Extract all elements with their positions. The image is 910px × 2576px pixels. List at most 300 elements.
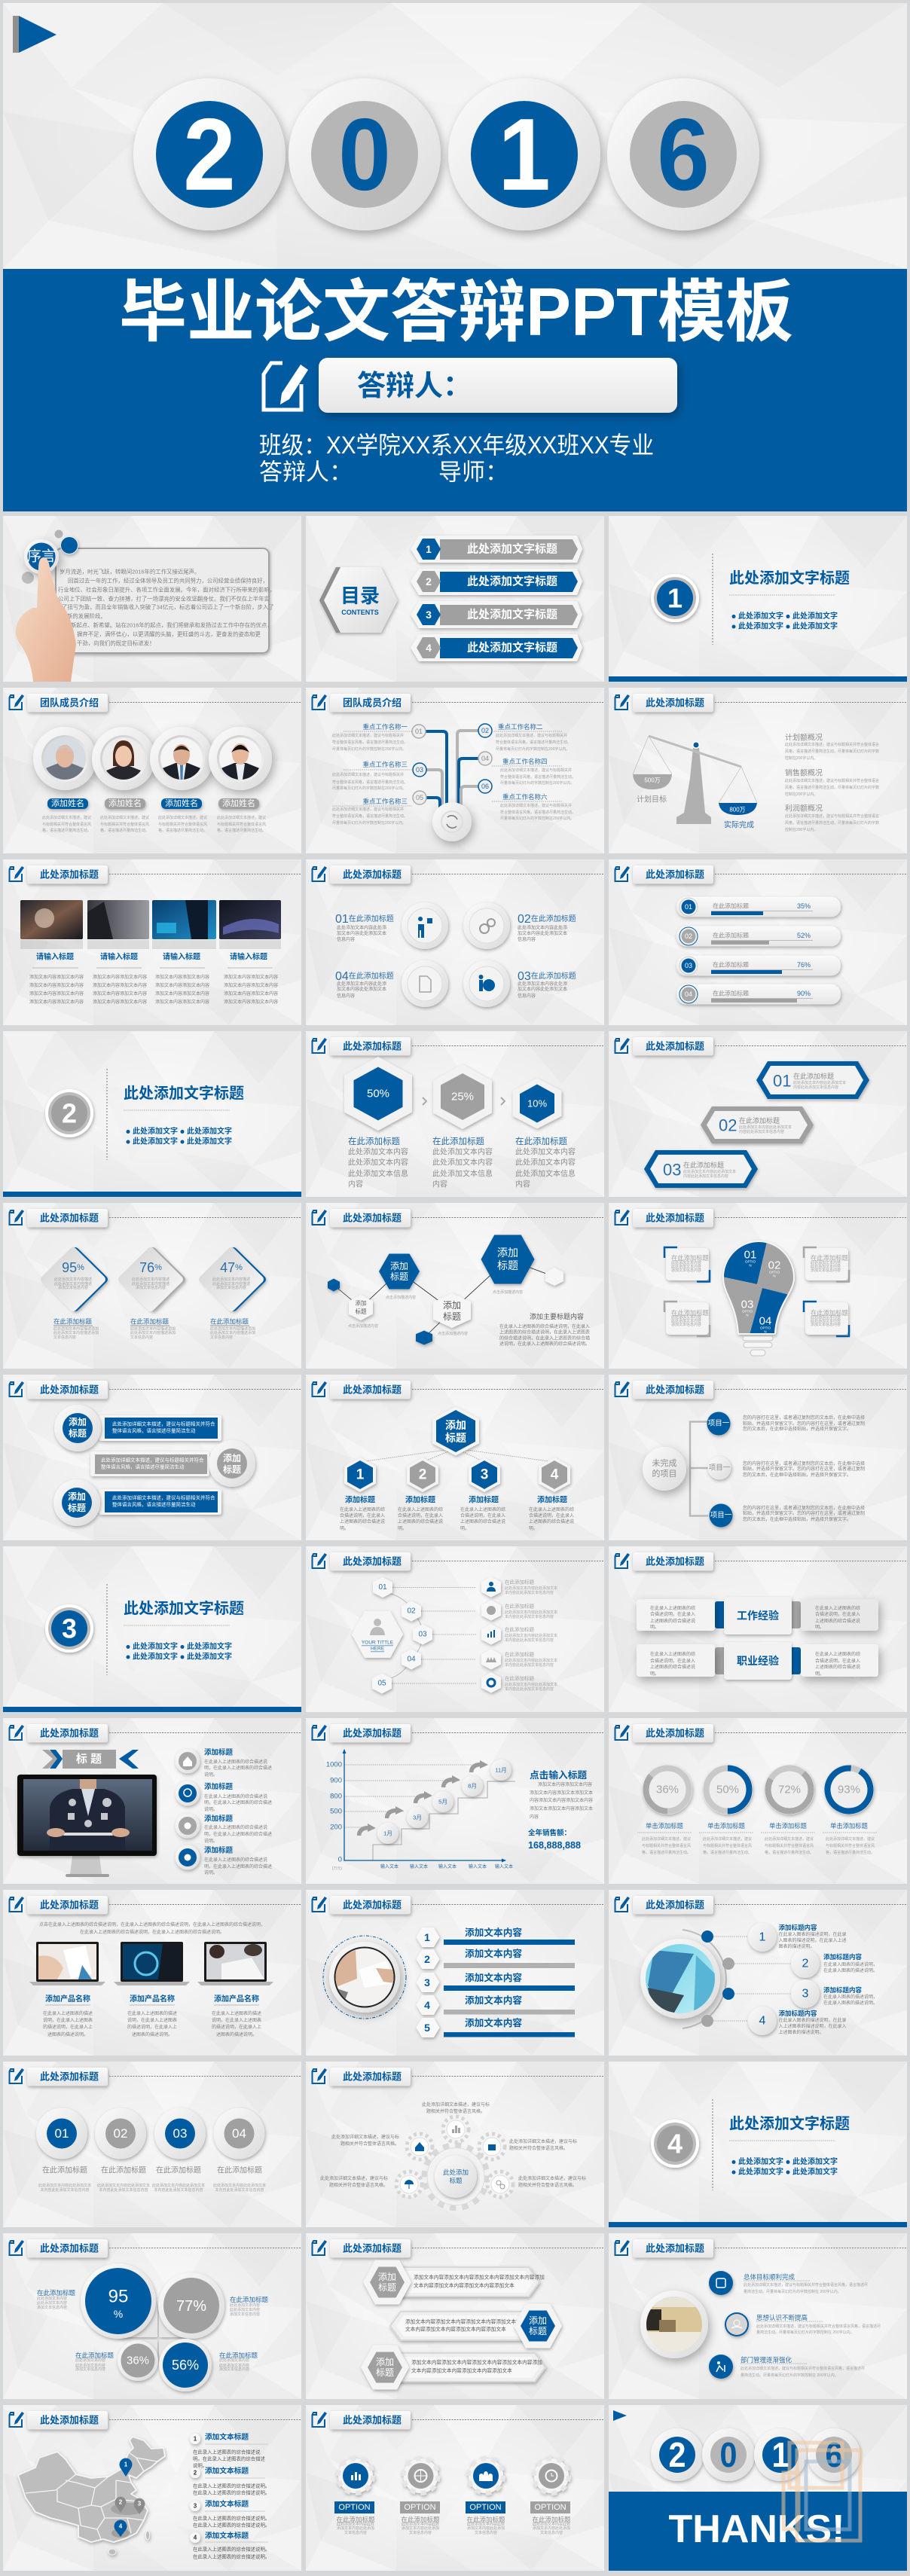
hierarchy hexagons bbox=[344, 1457, 570, 1492]
circle captions: 本内容此处添加文本信息内容 bbox=[99, 2187, 148, 2193]
slide header: 此处添加标题 bbox=[343, 1384, 402, 1395]
hierarchy captions: 在此录入上述图表的综 bbox=[340, 1506, 385, 1512]
preface badge: 序言 bbox=[27, 548, 56, 565]
member descriptions: 此处添加详细文本描述，建议 bbox=[100, 815, 149, 820]
node captions: 点击添加描述内容 bbox=[386, 1295, 416, 1300]
member portrait 1 bbox=[33, 727, 96, 790]
diamond 95%: 此处添加文本内容描述 bbox=[54, 1281, 92, 1286]
bar item 2: 添加 bbox=[223, 1452, 241, 1463]
left items bbox=[335, 913, 394, 999]
text card: 新起点、新希望。站在2016年的起点，我们将继承和发扬过去工作中存在的优点， bbox=[71, 622, 273, 628]
section number: 1 bbox=[667, 583, 682, 613]
feature text: 在此录入上述图表的综合描述说 bbox=[204, 1793, 267, 1799]
work experience row: 明。 bbox=[815, 1625, 824, 1630]
orbit arc bbox=[682, 1930, 726, 2028]
number circles: 02 bbox=[114, 2126, 127, 2141]
list texts: 此处添加文本内容此处添加文本 bbox=[505, 1610, 557, 1615]
network links bbox=[334, 1259, 554, 1338]
row 2: 添加文本内容添加文本内容添加文本内容添加文本内容添加 bbox=[405, 2318, 536, 2324]
product captions: 的描述说明，在此录入上 bbox=[212, 2024, 261, 2030]
contents row 3: 此处添加文字标题 bbox=[467, 607, 557, 621]
hierarchy captions: 合描述说明，在此录入 bbox=[529, 1512, 574, 1518]
project nodes: 项目一 bbox=[709, 1464, 731, 1472]
map pins: 2 bbox=[119, 2499, 123, 2505]
bulb card bottom left: 添加文本信息内容 bbox=[671, 1322, 701, 1327]
hierarchy captions: 上述图表的综合描述说 bbox=[529, 1518, 574, 1525]
year circles 2016: 1 bbox=[498, 97, 551, 212]
chevrons bbox=[423, 1097, 505, 1105]
bulb card top right: 添加文本信息内容 bbox=[811, 1268, 841, 1273]
text card: 回首过去一年的工作，经过全体领导及员工的共同努力，公司经营业绩保持良好， bbox=[68, 577, 268, 584]
gear text: 题相关并符合整体语言风格。 bbox=[329, 2182, 388, 2188]
item 01: 在此添加标题 bbox=[793, 1072, 834, 1080]
bubble captions: 此处添加文本内容 bbox=[230, 2303, 260, 2308]
row 1: 标题 bbox=[378, 2282, 396, 2293]
month nodes: 5月 bbox=[438, 1799, 447, 1805]
node captions: 点击添加描述内容 bbox=[348, 1323, 378, 1329]
panel: hierarchy hexagons slide bbox=[306, 1375, 604, 1540]
hexagon 25%: 25% bbox=[451, 1091, 474, 1103]
year circles: 0 bbox=[720, 2435, 737, 2474]
left work items: 重点工作名称三 bbox=[362, 798, 408, 805]
project text: 您的内容打在这里，或者通过复制您的文本后，在此框中选择 bbox=[743, 1460, 865, 1467]
option captions: 在此添加标题 bbox=[532, 2516, 571, 2523]
item 03: 内容此处添加文本信息内容 bbox=[683, 1174, 728, 1179]
network nodes: 标题 bbox=[497, 1259, 518, 1271]
section bullets bbox=[732, 2156, 838, 2177]
contents row 1: 1 bbox=[426, 543, 432, 555]
lobby photo bbox=[640, 2291, 708, 2358]
section bullets: 此处添加文字 bbox=[792, 2166, 838, 2177]
option captions bbox=[336, 2516, 571, 2535]
work experience row: 上述图表的综合描述说 bbox=[650, 1618, 695, 1624]
number circles: 4 bbox=[759, 2014, 766, 2028]
section bullets bbox=[732, 611, 838, 631]
diamond captions: 此处添加文本内容描述添加 bbox=[53, 1330, 99, 1335]
chart axes bbox=[344, 1750, 505, 1860]
bubble 56% bbox=[159, 2339, 212, 2391]
list texts: 此处添加文本内容此处添加文本 bbox=[505, 1682, 557, 1687]
contents row 1 bbox=[411, 536, 582, 563]
gear text: 此处添加详细文本描述，建议与标 bbox=[422, 2101, 490, 2107]
icon circles bbox=[402, 902, 510, 1007]
panel: four icon circles slide bbox=[306, 859, 604, 1025]
circle captions: 在此添加标题 bbox=[101, 2165, 146, 2175]
milestone text bbox=[741, 2273, 881, 2378]
option captions: 添加文本内容此处添加 bbox=[467, 2526, 505, 2531]
overview texts: 计划额概况 bbox=[785, 732, 823, 743]
diamond 95% bbox=[44, 1251, 104, 1308]
work experience row: 明。 bbox=[650, 1625, 659, 1630]
orbit text: 在此录入图表的描述说明。 bbox=[823, 2000, 878, 2006]
member portrait 2 bbox=[92, 727, 155, 790]
bulb chart: 04 bbox=[759, 1315, 771, 1327]
overview texts: 控制在200字以内。 bbox=[785, 792, 817, 797]
slide header bbox=[9, 865, 301, 884]
hierarchy captions: 添加标题 bbox=[405, 1494, 435, 1505]
year circles 2016: 0 bbox=[338, 97, 391, 212]
number circles bbox=[748, 1923, 820, 2035]
icon: document and pen bbox=[264, 363, 308, 410]
hexagon captions: 在此添加标题 bbox=[515, 1136, 567, 1146]
hexagon captions: 此处添加文本内容 bbox=[348, 1157, 408, 1167]
member descriptions: 此处添加详细文本描述，建议 bbox=[217, 815, 266, 820]
panel: thanks slide bbox=[609, 2405, 907, 2571]
bubble captions: 此处添加文本内容 bbox=[37, 2296, 67, 2301]
orbit text: 在此录入图表的描述说明，在此录 bbox=[779, 1931, 847, 1937]
row 1: 添加文本内容添加文本内容添加文本内容添加文本内容添加 bbox=[414, 2273, 545, 2281]
bulb card top right bbox=[804, 1247, 849, 1282]
axis arrowheads bbox=[342, 1749, 506, 1862]
orbit text: 添加标题内容 bbox=[823, 1986, 863, 1994]
item 03: 此处添加文本内容此处添加文本 bbox=[683, 1169, 736, 1174]
photo columns text: 添加文本内容添加文本内容 bbox=[224, 990, 278, 997]
section bullets: 此处添加文字 bbox=[738, 621, 783, 631]
gear text: 此处添加详细文本描述，建议与标 bbox=[509, 2138, 577, 2144]
panel: light bulb slide bbox=[609, 1203, 907, 1369]
section bullets: 此处添加文字 bbox=[187, 1651, 232, 1662]
milestone text: 部门管理逐渐强化 bbox=[741, 2356, 792, 2364]
right work items: 此处添加详细文本描述，建议与标题相关并 bbox=[496, 733, 567, 738]
stair line bbox=[373, 1781, 515, 1860]
left work items: 重点工作名称三 bbox=[362, 761, 408, 768]
year circles: 6 bbox=[826, 2435, 842, 2474]
diamond captions: 在此添加标题 bbox=[210, 1318, 249, 1326]
project text: 您的文本后，在此框中选择粘贴，并选择只保留文字。 bbox=[743, 1516, 851, 1522]
hierarchy captions: 上述图表的综合描述说 bbox=[398, 1518, 443, 1525]
option gear 1 bbox=[338, 2458, 373, 2493]
option captions: 此处添加文本内容此处 bbox=[533, 2522, 570, 2526]
preface badge bbox=[24, 539, 59, 574]
slide header bbox=[9, 694, 301, 713]
diamond 47%: 此处添加文本内容描述 bbox=[212, 1277, 250, 1282]
hierarchy captions: 添加标题 bbox=[345, 1494, 375, 1505]
photo columns text: 添加文本内容添加文本内容 bbox=[29, 982, 84, 988]
icon: small play arrow bbox=[613, 2410, 627, 2421]
number hexagons: 04 bbox=[407, 1656, 416, 1663]
panel: gears slide bbox=[306, 2062, 604, 2227]
photo columns text bbox=[29, 952, 278, 1005]
slide header bbox=[9, 2239, 301, 2258]
diamond 95%: 添加文本信息内容 bbox=[58, 1285, 88, 1290]
option buttons: OPTION bbox=[534, 2503, 566, 2512]
orbit text: 在此录入图表的描述说明， bbox=[823, 1961, 878, 1967]
right items: 加文本内容此处添加文本 bbox=[518, 930, 567, 936]
career experience row: 合描述说明，在此录入 bbox=[815, 1658, 860, 1664]
panel: section 2 slide bbox=[3, 1031, 301, 1197]
orbit text: 在此录入图表的描述说明， bbox=[823, 1994, 878, 2000]
panel: experience cards slide bbox=[609, 1546, 907, 1712]
row 3: 添加文本内容添加文本内容添加文本内容添加文本内容添加 bbox=[411, 2359, 542, 2365]
right work items: 符合整体语言风格，语言描述尽量简洁生动。 bbox=[496, 740, 571, 745]
list texts: 在此添加标题 bbox=[505, 1675, 535, 1681]
circle captions: 在此添加标题 bbox=[42, 2165, 87, 2175]
bubble captions: 此处添加文本内容 bbox=[75, 2358, 105, 2363]
bar rows: 添加文本内容 bbox=[465, 1972, 522, 1983]
project text: 您的文本后，在此框中选择粘贴，并选择只保留文字。 bbox=[743, 1472, 851, 1478]
slide header bbox=[312, 1381, 604, 1399]
diamond captions: 文本信息内容 bbox=[130, 1335, 153, 1340]
project text: 您的内容打在这里，或者通过复制您的文本后，在此框中选择 bbox=[743, 1415, 865, 1421]
progress 01: 在此添加标题 bbox=[713, 902, 749, 910]
section number: 4 bbox=[667, 2129, 682, 2159]
member name tags: 添加姓名 bbox=[165, 798, 198, 808]
panel: team members slide bbox=[3, 688, 301, 853]
tree nodes: 01 bbox=[415, 728, 423, 735]
overview texts bbox=[785, 732, 879, 832]
bulb chart: OPTIO bbox=[769, 1270, 780, 1274]
hexagon 25% bbox=[433, 1064, 492, 1129]
slide header bbox=[615, 1896, 907, 1915]
project nodes: 项目一 bbox=[708, 1419, 730, 1428]
center gear: 此处添加 bbox=[443, 2169, 469, 2176]
bulb chart: N bbox=[773, 1274, 776, 1277]
hierarchy links bbox=[360, 1448, 554, 1462]
donut captions: 格，语言描述尽量简洁生动。 bbox=[642, 1850, 691, 1855]
gear text: 此处添加详细文本描述，建议与标 bbox=[518, 2175, 586, 2181]
orbit text: 在此录入图表的描述说明，在此录 bbox=[779, 2017, 847, 2023]
bar item 2: 此处添加详细文本描述，建议与标题相关并符合 bbox=[101, 1457, 204, 1463]
bulb card top left: 在此添加标题 bbox=[671, 1254, 709, 1262]
bubble captions: 在此添加标题 bbox=[37, 2289, 76, 2297]
photo columns text: 添加文本内容添加文本内容 bbox=[93, 999, 147, 1005]
growth arrows bbox=[359, 1760, 488, 1836]
list texts: 此处添加文本内容此处添加文本 bbox=[505, 1633, 557, 1638]
x axis labels bbox=[380, 1863, 513, 1869]
bulb chart: 01 bbox=[744, 1249, 756, 1261]
panel: lobby photo slide bbox=[609, 2233, 907, 2399]
circle captions: 此处添加文本内容此处添加文本 bbox=[213, 2183, 266, 2188]
donut 72%: 72% bbox=[778, 1784, 801, 1796]
orbit text: 添加标题内容 bbox=[779, 2010, 817, 2017]
slide header: 此处添加标题 bbox=[343, 2071, 402, 2082]
milestone text: 量简洁生动。尽量将每页幻灯片的字数控制在 200字以内。 bbox=[756, 2330, 854, 2335]
section bullets bbox=[127, 1641, 232, 1662]
circle captions: 此处添加文本内容此处添加文本 bbox=[38, 2183, 91, 2188]
panel: section 1 slide bbox=[609, 516, 907, 682]
orbit text bbox=[779, 1924, 878, 2035]
slide header: 此处添加标题 bbox=[40, 1728, 99, 1738]
list texts: 在此添加标题 bbox=[505, 1603, 535, 1609]
hierarchy captions: 添加标题 bbox=[469, 1494, 499, 1505]
donut 36% bbox=[643, 1765, 692, 1814]
main description: 在此录入上述图表的综合描述说明，在此录入 bbox=[499, 1323, 590, 1329]
hierarchy captions bbox=[340, 1494, 574, 1531]
list texts bbox=[505, 1579, 557, 1692]
panel: monitor slide bbox=[3, 1718, 301, 1884]
slide header: 此处添加标题 bbox=[343, 1213, 402, 1223]
circle captions: 本内容此处添加文本信息内容 bbox=[215, 2187, 264, 2193]
building photo bbox=[640, 1939, 720, 2019]
photo ring bbox=[323, 1936, 406, 2019]
career experience row bbox=[637, 1642, 878, 1680]
left items: 此处添加文本内容此处添 bbox=[337, 925, 386, 931]
map legend items: 添加文本标题 bbox=[205, 2499, 249, 2508]
map legend items bbox=[190, 2431, 270, 2559]
option captions: 此处添加文本内容此处 bbox=[467, 2522, 505, 2526]
row 3: 标题 bbox=[376, 2367, 394, 2378]
chart description: 添加文本内容添加文本添加文本 bbox=[530, 1790, 593, 1796]
number hexagons: 01 bbox=[378, 1583, 387, 1592]
chart description: 内容添加文本内容添加文本内容 bbox=[530, 1797, 593, 1803]
text card: 了扭亏为盈，而且全年销售收入突破了34亿元，标志着公司迈上了一个新台阶，步入了 bbox=[62, 604, 274, 610]
slide header bbox=[615, 1209, 907, 1228]
photo columns text: 请输入标题 bbox=[163, 952, 200, 961]
right work items: 尽量将每页幻灯片的字数控制在200字以内。 bbox=[496, 746, 570, 752]
diamond captions bbox=[53, 1318, 255, 1340]
slide header bbox=[9, 2068, 301, 2086]
right work items: 此处添加详细文本描述，建议与标题相关并 bbox=[500, 803, 572, 808]
milestone text: 思想认识不断提高 bbox=[756, 2314, 808, 2321]
left items: 信息内容 bbox=[337, 936, 355, 942]
gear text bbox=[320, 2101, 586, 2188]
bulb chart: N bbox=[746, 1314, 749, 1317]
career experience row: 上述图表的综合描述说 bbox=[815, 1664, 860, 1670]
member name tags: 添加姓名 bbox=[222, 798, 255, 808]
overview texts: 风格，语言描述尽量简洁生动，尽量将每页幻灯片的字数 bbox=[785, 749, 879, 754]
bubble 95% bbox=[81, 2263, 156, 2339]
map legend items: 添加文本标题 bbox=[205, 2531, 249, 2540]
number circles: 01 bbox=[55, 2126, 69, 2141]
milestone text: 总体目标顺利完成 bbox=[744, 2273, 795, 2281]
y axis labels: 500 bbox=[330, 1808, 342, 1815]
panel: unfinished projects slide bbox=[609, 1375, 907, 1540]
bar rows: 添加文本内容 bbox=[465, 1927, 522, 1938]
feature text: 说明。 bbox=[204, 1806, 218, 1812]
slide header: 团队成员介绍 bbox=[40, 697, 99, 708]
bulb chart bbox=[722, 1240, 797, 1356]
map legend items: 添加文本标题 bbox=[205, 2431, 249, 2442]
hexagon captions: 此处添加文本信息 bbox=[432, 1169, 493, 1178]
panel: cover slide bbox=[3, 3, 907, 511]
overview texts: 此处添加详细文本描述，建议与标题相关并符合整体语言 bbox=[785, 813, 879, 819]
slide header: 此处添加标题 bbox=[343, 1041, 402, 1051]
donut captions: 单击添加标题 bbox=[707, 1822, 745, 1830]
right items: 信息内容 bbox=[518, 993, 536, 999]
donut 93%: 93% bbox=[838, 1784, 860, 1796]
bulb card bottom left: 在此添加标题 bbox=[671, 1309, 709, 1317]
bracket connector bbox=[690, 1422, 708, 1515]
photo columns text: 添加文本内容添加文本内容 bbox=[224, 974, 278, 980]
panel: building orbit slide bbox=[609, 1890, 907, 2056]
circle captions: 本内容此处添加文本信息内容 bbox=[154, 2187, 203, 2193]
right work items: 符合整体语言风格，语言描述尽量简洁生动。 bbox=[500, 774, 576, 780]
slide header bbox=[312, 1724, 604, 1743]
bar rows: 添加文本内容 bbox=[465, 1995, 522, 2006]
tree nodes: 05 bbox=[416, 794, 423, 801]
monitor stand bbox=[66, 1856, 109, 1877]
member portrait 4 bbox=[209, 727, 272, 790]
bar item 3: 标题 bbox=[68, 1502, 86, 1513]
section title: 此处添加文字标题 bbox=[124, 1084, 244, 1102]
bulb card top right: 此处添加文本内容 bbox=[811, 1260, 841, 1265]
donut captions: 与标题相关并符合整体语言风 bbox=[826, 1843, 875, 1848]
chart description: 添加文本添加文本内容添加文本 bbox=[530, 1805, 593, 1811]
bubble 95%: % bbox=[114, 2308, 123, 2320]
product captions: 说明，在此录入上述图表 bbox=[127, 2017, 177, 2023]
member descriptions: 与标题相关并符合整体语言风 bbox=[217, 822, 266, 827]
member descriptions: 与标题相关并符合整体语言风 bbox=[42, 822, 91, 827]
donut 36%: 36% bbox=[656, 1784, 679, 1796]
option gear 3 bbox=[469, 2458, 503, 2493]
panel: preface slide bbox=[3, 516, 301, 682]
numbered hexagons bbox=[416, 1927, 440, 2037]
left work items: 符合整体语言风格，语言描述尽量简洁生动。 bbox=[332, 780, 408, 785]
month nodes: 3月 bbox=[413, 1814, 422, 1821]
overview texts: 控制在200字以内。 bbox=[785, 827, 817, 832]
bulb card bottom right: 此处添加文本内容 bbox=[811, 1314, 841, 1320]
top hexagon: 添加 bbox=[445, 1419, 466, 1431]
career experience row: 在此录入上述图表的综 bbox=[650, 1651, 695, 1657]
list texts: 此处添加文本内容此处添加文本 bbox=[505, 1586, 557, 1591]
photo columns text: 添加文本内容添加文本内容 bbox=[93, 982, 147, 988]
item 03: 03 bbox=[663, 1160, 681, 1180]
hexagon 50%: 50% bbox=[367, 1088, 389, 1100]
member descriptions: 格，语言描述尽量简洁生动。 bbox=[100, 828, 149, 833]
diamond captions: 文本信息内容 bbox=[53, 1335, 76, 1340]
slide header: 此处添加标题 bbox=[646, 1384, 704, 1395]
main description bbox=[499, 1312, 590, 1347]
map legend items: 添加文本标题 bbox=[205, 2466, 249, 2475]
left pan: 500万 bbox=[644, 777, 661, 783]
watermark bbox=[783, 2443, 860, 2541]
network nodes: 添加 bbox=[497, 1247, 518, 1259]
left work items: 尽量将每页幻灯片的字数控制在200字以内。 bbox=[332, 820, 406, 826]
left items: 信息内容 bbox=[337, 993, 355, 999]
panel: stair chart slide bbox=[306, 1718, 604, 1884]
donut 50% bbox=[703, 1765, 753, 1814]
node captions bbox=[348, 1290, 523, 1336]
option buttons: OPTION bbox=[469, 2503, 502, 2512]
slide header bbox=[615, 694, 907, 713]
donut captions: 格，语言描述尽量简洁生动。 bbox=[826, 1850, 875, 1855]
slide header: 此处添加标题 bbox=[646, 2243, 704, 2254]
panel: percentage bubbles slide bbox=[3, 2233, 301, 2399]
map legend items: 在此录入上述图表的综合描述说明。 bbox=[193, 2553, 270, 2559]
member descriptions: 格，语言描述尽量简洁生动。 bbox=[42, 828, 91, 833]
bubble captions: 添加文本信息内容 bbox=[75, 2367, 105, 2372]
bar item 2 bbox=[90, 1440, 255, 1487]
slide header: 此处添加标题 bbox=[40, 2071, 99, 2082]
y axis labels: 800 bbox=[330, 1793, 342, 1800]
panel: four photos slide bbox=[3, 859, 301, 1025]
hexagon 10% bbox=[512, 1079, 562, 1128]
option captions: 在此添加标题 bbox=[466, 2516, 505, 2523]
hierarchy hexagons: 2 bbox=[419, 1467, 426, 1482]
milestone icons bbox=[709, 2271, 749, 2379]
right work items bbox=[492, 723, 576, 821]
progress 02: 在此添加标题 bbox=[713, 931, 749, 939]
photo columns text: 添加文本内容添加文本内容 bbox=[224, 982, 278, 988]
hexagon captions: 此处添加文本内容 bbox=[432, 1157, 493, 1167]
main description: 的综合描述说明，在此录入上述图表的综合描 bbox=[499, 1335, 590, 1341]
item 03: 在此添加标题 bbox=[683, 1161, 724, 1169]
tree nodes: 06 bbox=[481, 783, 489, 790]
bubble captions: 此处添加文本内容 bbox=[37, 2300, 67, 2306]
diamond captions: 在此添加标题 bbox=[130, 1318, 169, 1326]
slide header: 此处添加标题 bbox=[40, 1900, 99, 1910]
diamond 76%: 76% bbox=[139, 1260, 162, 1275]
bubble 77%: 77% bbox=[176, 2298, 206, 2315]
bulb card bottom left bbox=[664, 1302, 710, 1336]
circle captions: 在此添加标题 bbox=[217, 2165, 262, 2175]
hierarchy captions: 明。 bbox=[340, 1526, 349, 1531]
number hexagons: 05 bbox=[377, 1680, 386, 1687]
number circles bbox=[36, 2107, 265, 2159]
number circles: 3 bbox=[802, 1987, 809, 2001]
work experience row: 合描述说明，在此录入 bbox=[650, 1611, 695, 1617]
map legend items: 在此录入上述图表的综合描述说明。 bbox=[193, 2489, 270, 2496]
